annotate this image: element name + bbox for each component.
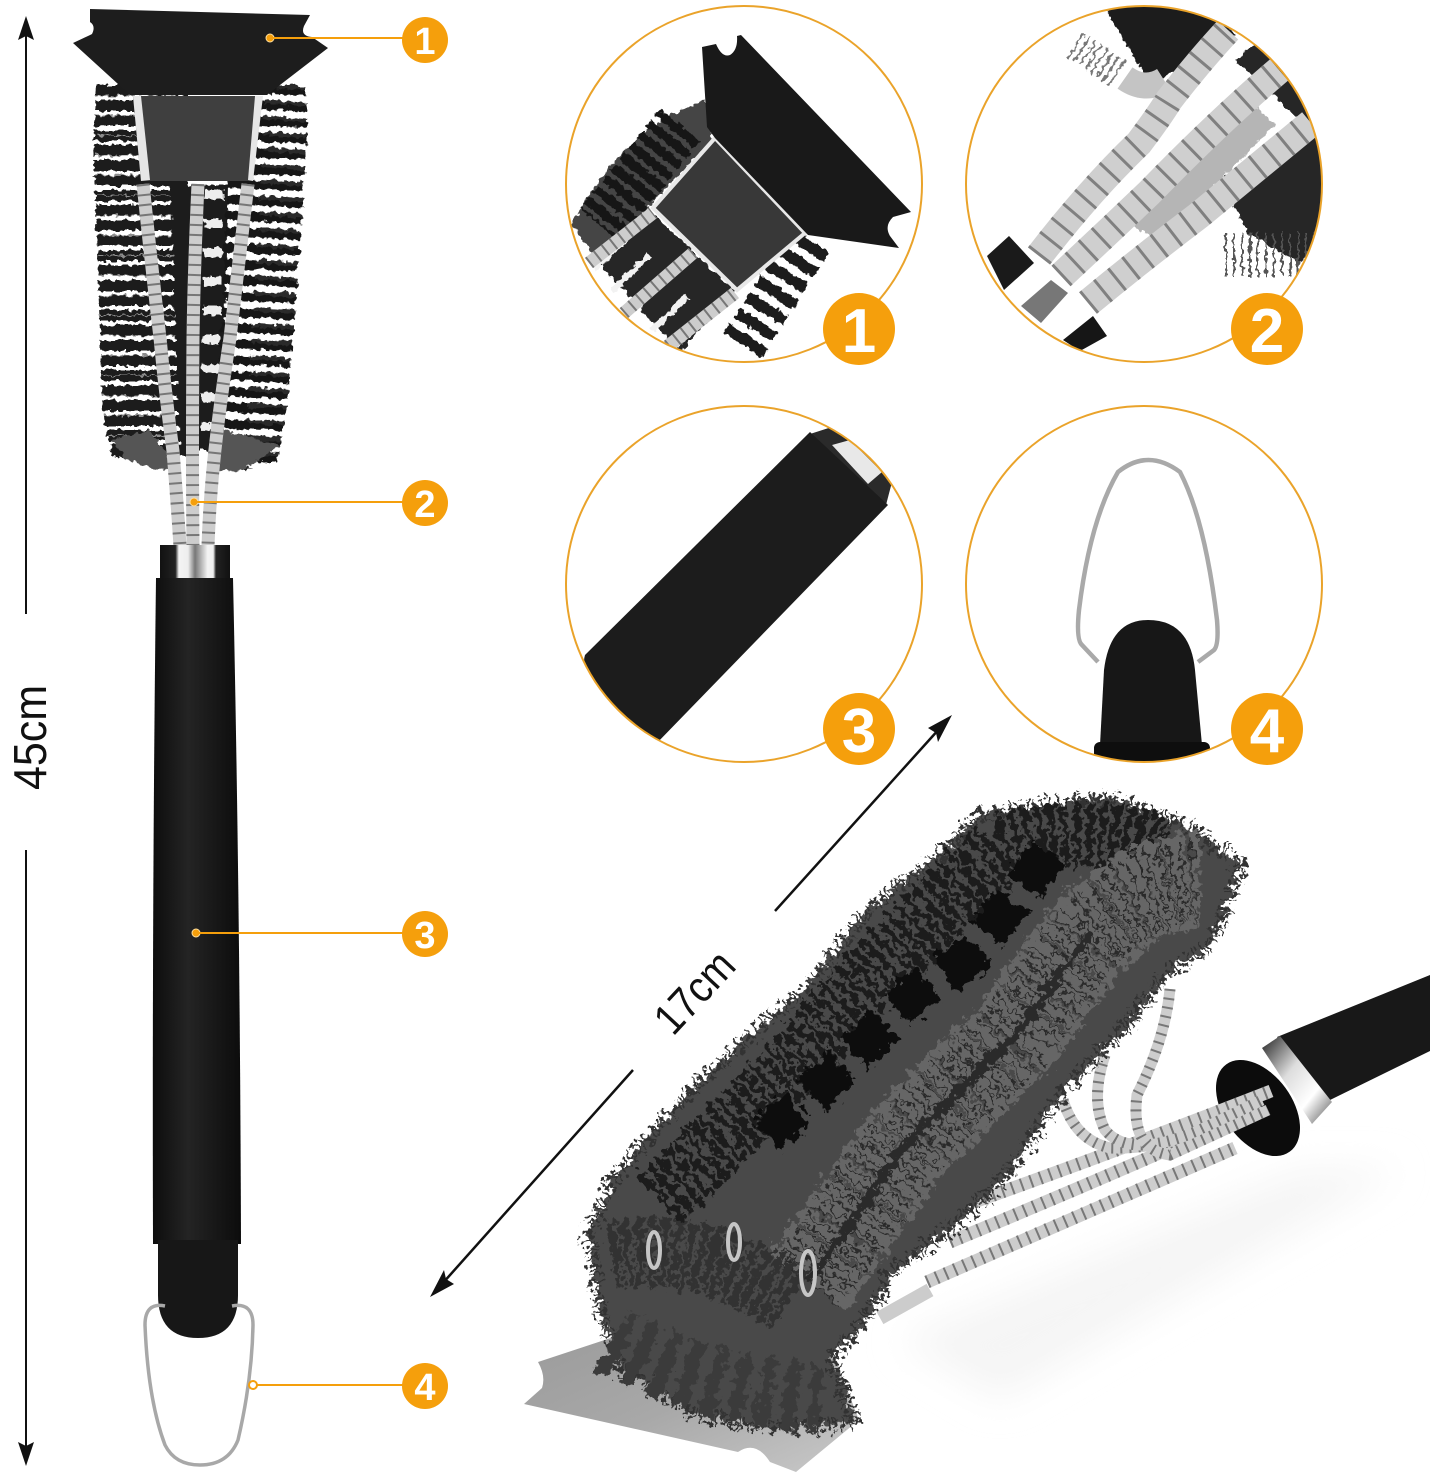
detail circle 4: end cap and loop: 4 [1250, 697, 1285, 766]
detail circle 2: twisted wires [966, 0, 1325, 366]
dimension: 17cm head [430, 715, 952, 1297]
dimension: 45cm length: 45cm [4, 685, 56, 790]
ferrule [160, 545, 230, 579]
dimension: 17cm head: 17cm [644, 941, 745, 1044]
blade [524, 1325, 859, 1472]
callout 4 on brush: 4 [414, 1367, 436, 1409]
detail circle 1: scraper head [566, 6, 922, 366]
callout 3 on brush: 3 [414, 915, 436, 957]
detail circle 4: end cap and loop [966, 406, 1322, 766]
bristle mass [589, 798, 1241, 1428]
callout 1 on brush: 1 [414, 21, 436, 63]
end cap [158, 1240, 238, 1338]
handle [153, 578, 241, 1244]
detail circle 1: scraper head: 1 [842, 297, 876, 366]
wires [880, 989, 1271, 1318]
detail circle 3: handle: 3 [842, 697, 876, 766]
hanging loop [145, 1305, 253, 1465]
detail circle 2: twisted wires: 2 [1250, 297, 1284, 366]
twisted wires [143, 184, 248, 546]
handle and ferrule [1199, 975, 1430, 1172]
callout 3 on brush [192, 911, 448, 957]
scraper head [73, 9, 328, 181]
soft shadow [900, 1170, 1400, 1400]
callout 2 on brush [190, 480, 448, 526]
callout 4 on brush [249, 1363, 448, 1409]
wire rings [648, 1224, 815, 1295]
bristles [112, 85, 290, 472]
callout 2 on brush: 2 [414, 484, 436, 526]
detail circle 3: handle [566, 406, 922, 766]
dimension: 45cm length [4, 16, 56, 1466]
angled brush photo [524, 798, 1430, 1472]
callout 1 on brush [266, 17, 448, 63]
full brush, front view [73, 9, 328, 1465]
